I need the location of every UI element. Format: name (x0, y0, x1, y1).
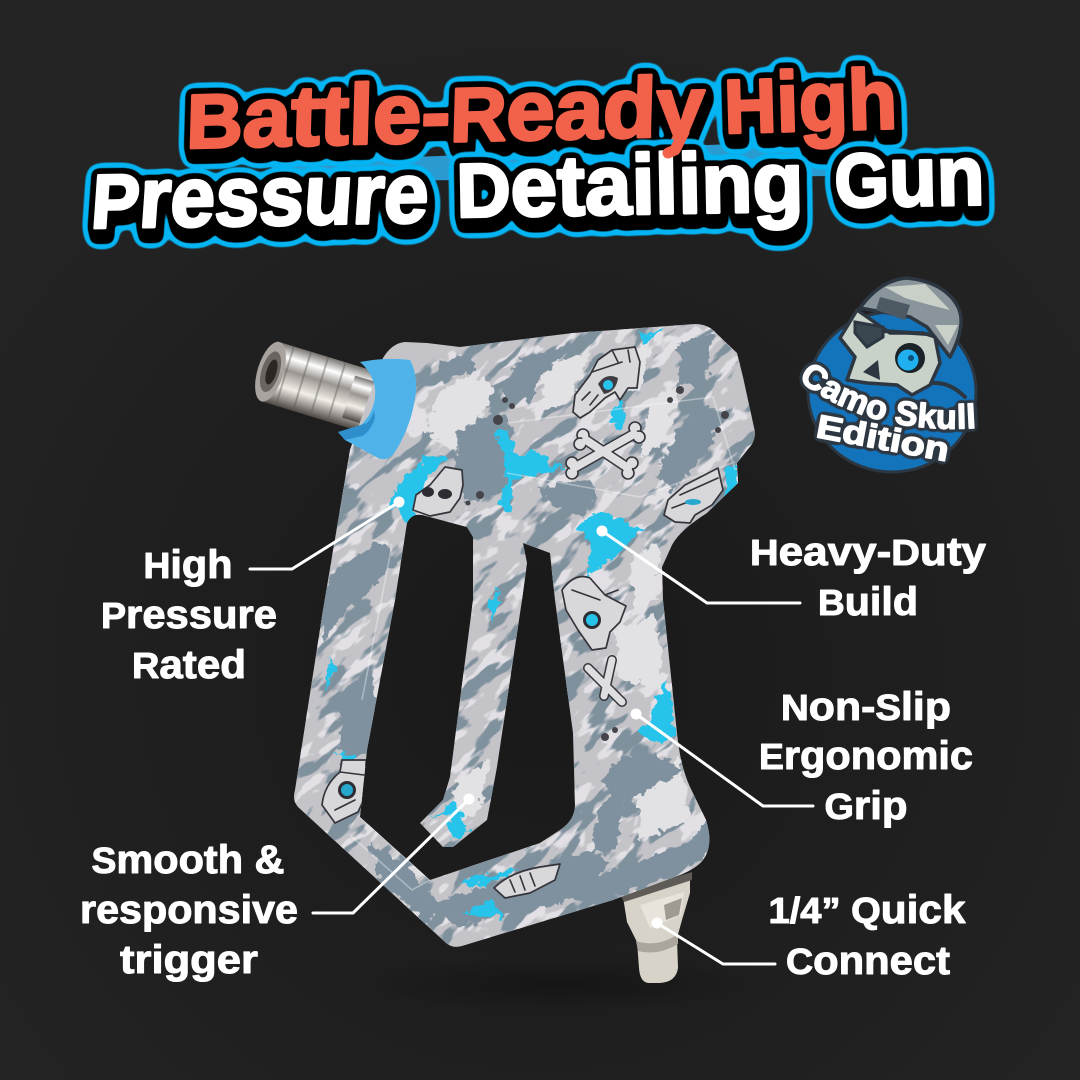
panel creases (350, 397, 735, 890)
callout: smooth and responsive trigger: Smooth & (92, 838, 284, 882)
callout: quick connect: Connect (786, 939, 950, 983)
icon: blue collar (338, 359, 416, 459)
title line 2: Pressure (89, 146, 432, 247)
icon: eyepatch (855, 322, 883, 347)
badge: camo skull edition (799, 276, 978, 474)
callout: smooth and responsive trigger: trigger (120, 938, 258, 982)
callout: high pressure rated: Pressure (101, 593, 277, 637)
camo: light patches (425, 345, 690, 840)
callout: high pressure rated (101, 496, 404, 687)
title line 1: Battle-Ready (185, 59, 706, 167)
title line 1: High (723, 52, 898, 152)
badge text (799, 361, 978, 468)
callout: high pressure rated: High (144, 543, 232, 587)
icon: quick connect fitting (620, 872, 692, 983)
callout: smooth and responsive trigger: responsive (80, 888, 298, 932)
doodle: right skull (664, 468, 723, 523)
callout: heavy-duty build: Build (818, 580, 918, 624)
gun product image (255, 324, 758, 986)
badge text: Edition (814, 408, 952, 468)
icon: skull eye (895, 343, 925, 373)
icon: chrome coupler (249, 338, 385, 433)
camo: dark patches (320, 332, 716, 926)
title line 2 (89, 128, 985, 247)
icon: skull (840, 310, 965, 397)
callout: heavy-duty build: Heavy- Duty (750, 530, 987, 574)
callout: non-slip ergonomic grip: Non-Slip (781, 685, 951, 729)
callout: smooth and responsive trigger (80, 794, 474, 982)
callout: non-slip ergonomic grip: Grip (824, 784, 908, 828)
callout: high pressure rated: Rated (132, 643, 246, 687)
title (89, 52, 985, 247)
doodle: grip bones (588, 660, 622, 702)
title letter y tail (668, 132, 684, 153)
callout: non-slip ergonomic grip: Ergonomic (759, 734, 973, 778)
callout: non-slip ergonomic grip (630, 685, 973, 828)
title ribbon (268, 140, 830, 182)
title line 1 (185, 52, 898, 167)
icon: floor shadow (350, 957, 770, 1013)
doodle: bubbles (466, 386, 729, 741)
badge text: Camo Skull (799, 361, 978, 434)
icon: cap (860, 278, 961, 357)
camo: cyan patches (326, 330, 738, 918)
callout: quick connect (652, 888, 966, 983)
camo: generated texture (294, 324, 755, 947)
doodle: small skull front (413, 467, 463, 516)
doodle: grip skull (562, 576, 626, 650)
doodle: base skull (494, 864, 560, 898)
callout: heavy-duty build (596, 526, 987, 624)
doodle: crossbones (566, 422, 645, 479)
doodle: lower front skull (322, 760, 366, 823)
title line 2: Gun (834, 128, 985, 226)
badge circle (808, 312, 976, 472)
callout: quick connect: 1/4” Quick (768, 888, 966, 932)
title line 2: Detailing (456, 135, 804, 236)
doodle: big skull on body (573, 347, 640, 418)
gun body with camo (294, 324, 755, 947)
